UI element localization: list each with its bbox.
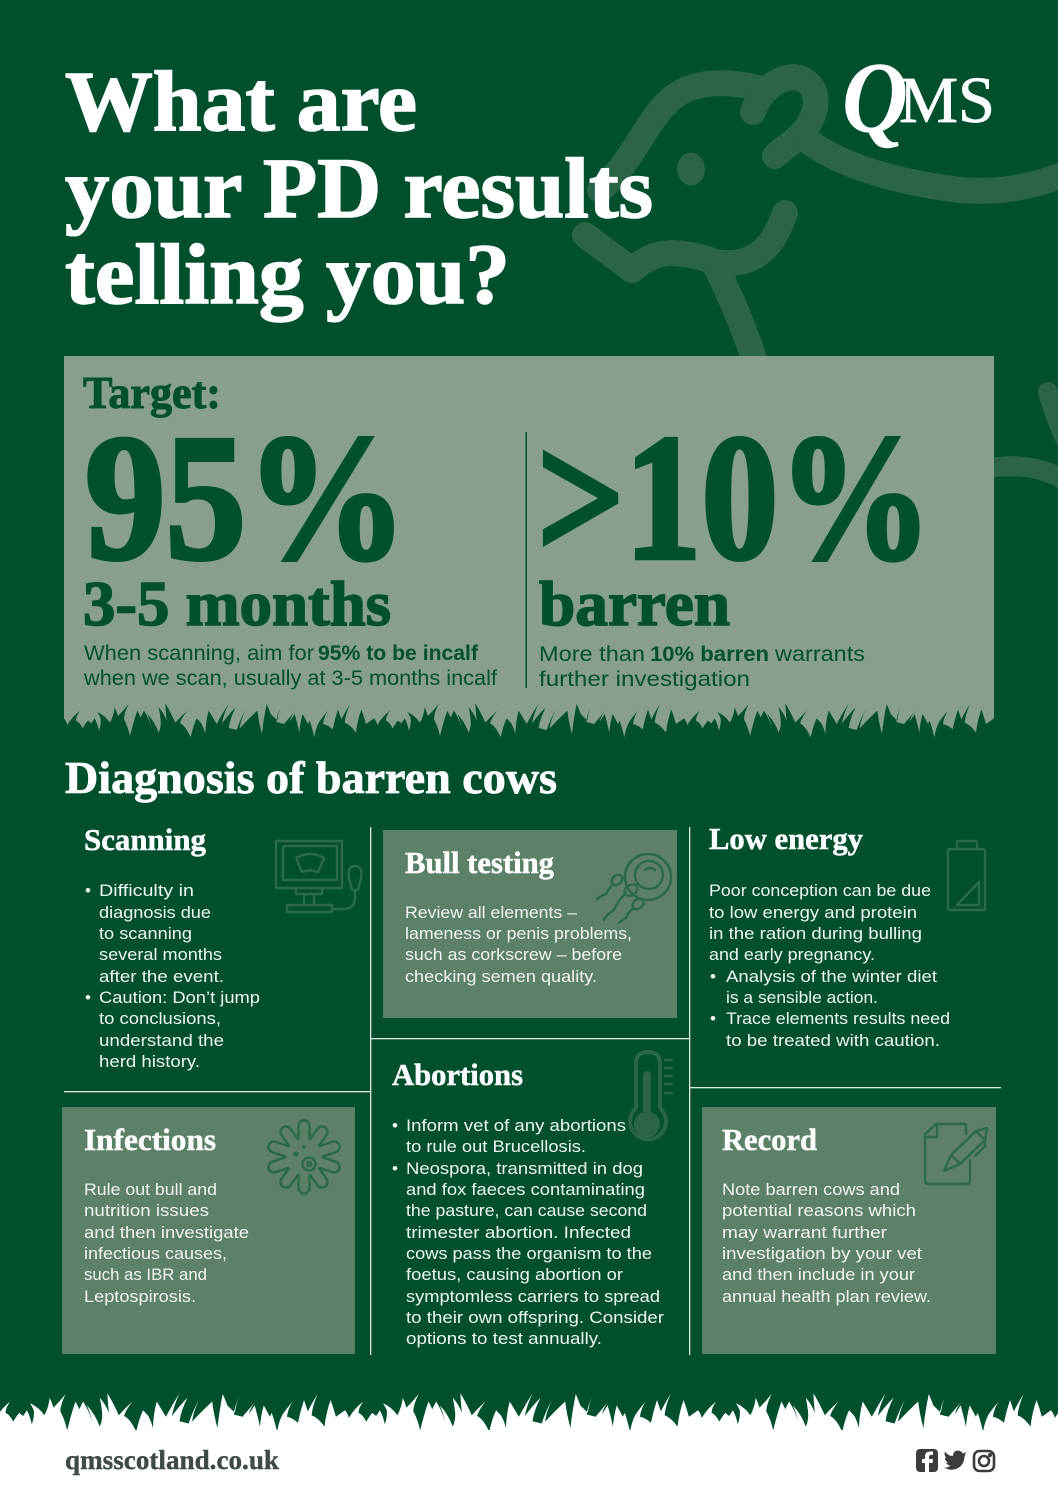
icon: sperm and egg [597,854,671,923]
text: 95 percent description: when we scan, usually at 3-5 months incalf [83,666,497,690]
text: low energy: Trace elements results need [726,1009,950,1028]
text: abortions bullets: symptomless carriers to spread [406,1287,660,1306]
stat: 95%: 95% [85,398,407,597]
heading: bull testing: Bull testing [405,845,554,880]
icon: ultrasound scanner [276,841,361,912]
text: barren description: 10% barren [650,642,769,666]
text: barren description: More than [539,642,645,666]
text: low energy: in the ration during bulling [709,924,922,943]
text: record: potential reasons which [722,1201,916,1220]
text: infections: infectious causes, [84,1244,227,1263]
text: 95 percent description: 95% to be incalf [318,641,479,665]
text: scanning bullets: several months [99,945,222,964]
text: record: annual health plan review. [722,1287,931,1306]
QMS logo: Q [842,42,908,155]
section heading: Diagnosis of barren cows [65,753,557,803]
icon: twitter [944,1450,966,1470]
text: scanning bullets: Caution: Don’t jump [99,988,260,1007]
text: abortions bullets: and fox faeces contaminating [406,1180,645,1199]
text: abortions bullets: trimester abortion. Infected [406,1223,631,1242]
text: abortions bullets: the pasture, can cause second [406,1201,647,1220]
panel: bull testing [383,830,677,1018]
text: scanning bullets: diagnosis due [99,903,211,922]
title: telling you? [65,226,510,322]
panel: scanning [84,822,361,1071]
text: scanning bullets: after the event. [99,967,224,986]
text: scanning bullets: to scanning [99,924,192,943]
icon: thermometer [630,1052,673,1139]
text: abortions bullets [392,1116,664,1348]
icon: document and pen [925,1124,987,1184]
text: barren description [539,642,865,691]
text: record: and then include in your [722,1265,915,1284]
panel: abortions [392,1052,673,1348]
text: abortions bullets: • [392,1159,398,1178]
icon: virus [274,1126,334,1188]
text: abortions bullets: cows pass the organism to the [406,1244,652,1263]
target label: Target: [83,368,221,418]
text: infections: and then investigate [84,1223,249,1242]
text: low energy: Analysis of the winter diet [726,967,937,986]
text: bull testing: checking semen quality. [405,967,597,986]
text: infections: nutrition issues [84,1201,209,1220]
text: barren description: warrants [774,642,865,666]
icon: low battery [948,841,985,910]
panel: low energy [709,821,985,1050]
QMS logo [842,42,995,155]
stat: more than 10%: >10% [537,398,932,597]
text: abortions bullets: Neospora, transmitted in dog [406,1159,643,1178]
heading: scanning: Scanning [84,822,206,857]
text: low energy: is a sensible action. [726,988,878,1007]
text: bull testing: such as corkscrew – before [405,945,622,964]
text: scanning bullets [85,881,260,1071]
text: record [722,1180,931,1306]
text: scanning bullets: understand the [99,1031,224,1050]
title: What are [65,53,417,149]
text: infections: Rule out bull and [84,1180,217,1199]
panel: infections [62,1107,355,1354]
text: abortions bullets: to rule out Brucellosis. [406,1137,586,1156]
panel: target [64,356,994,745]
website: qmsscotland.co.uk [65,1445,279,1475]
text: low energy: • [710,1009,716,1028]
stat label: 3-5 months: 3-5 months [83,568,391,639]
footer grass [0,1378,1058,1438]
QMS logo: MS [899,64,995,137]
text: abortions bullets: to their own offspring. Consider [406,1308,664,1327]
footer [0,1430,1058,1497]
text: record: Note barren cows and [722,1180,900,1199]
text: bull testing: Review all elements – [405,903,578,922]
heading: record: Record [722,1122,817,1157]
text: abortions bullets: • [392,1116,398,1135]
text: low energy: Poor conception can be due [709,881,931,900]
text: scanning bullets: herd history. [99,1052,200,1071]
text: bull testing: lameness or penis problems, [405,924,632,943]
text: 95 percent description [83,641,497,690]
text: abortions bullets: options to test annually. [406,1329,602,1348]
text: infections [84,1180,249,1306]
heading: abortions: Abortions [392,1057,523,1092]
text: low energy: and early pregnancy. [709,945,875,964]
text: scanning bullets: • [85,988,91,1007]
icon: facebook [916,1449,938,1472]
title [65,53,653,322]
text: low energy: to low energy and protein [709,903,917,922]
text: infections: such as IBR and [84,1265,207,1284]
stat label: barren: barren [539,568,730,639]
text: abortions bullets: Inform vet of any abortions [406,1116,626,1135]
panel grass edge [64,690,994,745]
title: your PD results [65,140,653,236]
text: low energy: • [710,967,716,986]
text: record: investigation by your vet [722,1244,922,1263]
heading: infections: Infections [84,1122,216,1157]
text: scanning bullets: • [85,881,91,900]
heading: low energy: Low energy [709,821,863,856]
text: 95 percent description: When scanning, aim for [84,641,314,665]
text: bull testing [405,903,632,986]
text: infections: Leptospirosis. [84,1287,196,1306]
text: scanning bullets: Difficulty in [99,881,194,900]
panel: record [702,1107,996,1354]
cow outline illustration [585,77,1058,480]
icon: instagram [974,1451,994,1471]
text: abortions bullets: foetus, causing abortion or [406,1265,623,1284]
text: low energy: to be treated with caution. [726,1031,940,1050]
text: scanning bullets: to conclusions, [99,1009,221,1028]
text: low energy [709,881,950,1050]
text: record: may warrant further [722,1223,887,1242]
text: barren description: further investigation [539,667,750,691]
